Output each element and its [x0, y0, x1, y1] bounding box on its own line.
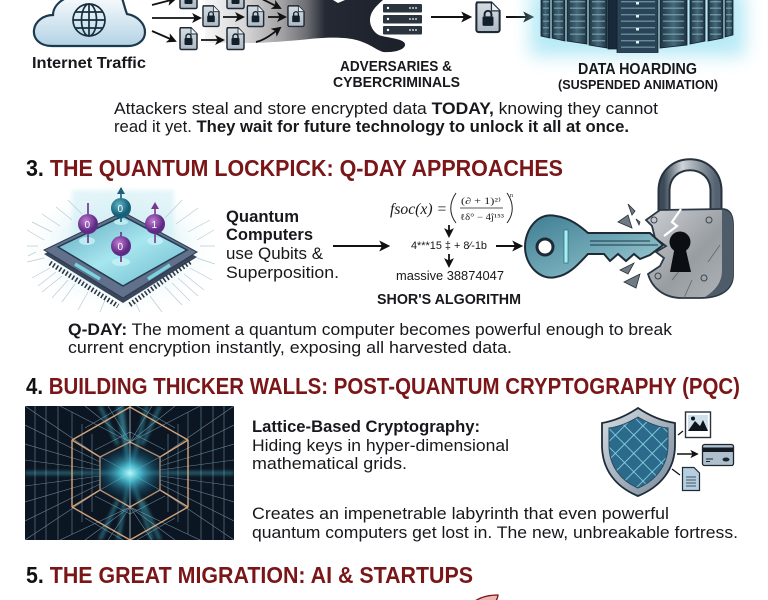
icon: encrypted packets [180, 0, 304, 50]
text block: lattice-based cryptography: mathematical grids. [252, 454, 407, 473]
text block: lattice-based cryptography [252, 417, 509, 473]
icon: credit card [702, 444, 734, 466]
text block: attackers steal: read it yet. They wait for future technology to unlock it all at once. [114, 117, 629, 136]
text block: q-day [68, 320, 673, 357]
chart: shor's algorithm formula: 4***15 ‡ + 8⁄-1b [411, 240, 487, 252]
formula: (∂ + 1)²⁾ [461, 196, 501, 206]
formula: n [510, 193, 513, 199]
text block: quantum computers: Superposition. [226, 264, 339, 282]
label: data hoarding: (SUSPENDED ANIMATION) [558, 77, 718, 92]
text block: attackers steal: Attackers steal and store encrypted data TODAY, knowing they cannot [114, 99, 658, 118]
shape: adversary hand [205, 0, 405, 52]
chart: shor's algorithm formula: SHOR'S ALGORITHM [377, 291, 521, 308]
qubit: left: 0 [84, 220, 90, 231]
icon: lock shards [618, 204, 640, 288]
icon: data center racks [530, 0, 745, 56]
icon: lattice shield [602, 408, 734, 496]
label: internet traffic: Internet Traffic [32, 55, 146, 72]
text block: quantum computers [226, 208, 339, 282]
panel: harvest now decrypt later diagram [32, 0, 745, 92]
label: adversaries: CYBERCRIMINALS [333, 74, 460, 91]
text block: quantum computers: Quantum [226, 208, 299, 226]
qubit: right: 1 [152, 220, 158, 231]
text block: q-day: current encryption instantly, exposing all harvested data. [68, 338, 512, 357]
arrows: shield to assets [672, 431, 697, 475]
label: data hoarding: DATA HOARDING [578, 61, 697, 78]
qubit: left [78, 203, 98, 243]
icon: quantum chip [23, 182, 219, 314]
arrow: to data center [506, 16, 532, 18]
formula: fsoc(x) = [390, 201, 447, 218]
arrow: to key [496, 245, 521, 247]
image: lattice grid [25, 406, 234, 540]
label: data hoarding [558, 61, 718, 92]
qubit: front: 0 [118, 242, 124, 253]
qubit: top: 0 [118, 204, 124, 215]
icon: padlock [618, 165, 733, 298]
qubit: top [111, 187, 131, 222]
chart: shor's algorithm formula [377, 193, 521, 308]
chart: shor's algorithm formula: massive 38874047 [396, 268, 504, 283]
label: adversaries [333, 58, 460, 91]
icon: server stack [383, 4, 422, 34]
text block: attackers steal [114, 99, 658, 136]
formula [390, 193, 513, 223]
icon: picture [686, 412, 710, 438]
icon: rocket tip [475, 595, 498, 600]
icon: key [525, 215, 663, 278]
formula: ℓδ° − 4ĵ¹⁵³ [460, 212, 504, 222]
icon: stolen encrypted file [476, 2, 500, 32]
qubit: front [111, 232, 131, 262]
arrow: to stolen file [431, 16, 470, 18]
arrow: to algorithm [333, 245, 388, 247]
text block: q-day: Q-DAY: The moment a quantum computer becomes powerful enough to break [68, 320, 673, 339]
icon: document [682, 468, 700, 490]
qubit: right [145, 202, 165, 243]
text block: lattice-based cryptography: Lattice-Based Cryptography: [252, 417, 480, 436]
text block: quantum computers: Computers [226, 226, 313, 244]
label: adversaries: ADVERSARIES & [340, 58, 452, 75]
heading: section 5: 5. THE GREAT MIGRATION: AI & STARTUPS [26, 562, 473, 588]
text block: impenetrable labyrinth: Creates an impenetrable labyrinth that even powerful [252, 504, 669, 523]
text block: quantum computers: use Qubits & [226, 245, 323, 263]
heading: section 3: 3. THE QUANTUM LOCKPICK: Q-DAY APPROACHES [26, 155, 563, 181]
text block: lattice-based cryptography: Hiding keys in hyper-dimensional [252, 436, 509, 455]
text block: impenetrable labyrinth [252, 504, 738, 542]
arrows: packet flow [152, 0, 285, 42]
text block: impenetrable labyrinth: quantum computers get lost in. The new, unbreakable fortress. [252, 523, 738, 542]
icon: internet cloud [34, 0, 145, 46]
